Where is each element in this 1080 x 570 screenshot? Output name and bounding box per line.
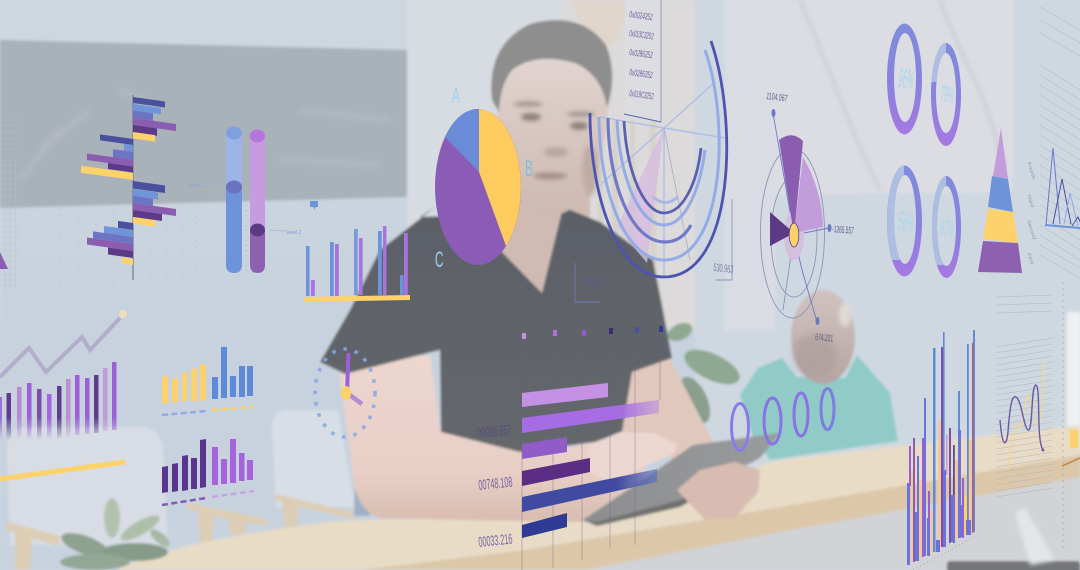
tier labels: Fourth (1026, 162, 1036, 180)
top markers (522, 326, 663, 339)
whiteboard curves (800, 0, 1005, 190)
code rows: 0x019C3252 (629, 88, 654, 102)
level 2 callout: level 2 (287, 230, 302, 236)
ring (887, 24, 922, 134)
column pale strip (725, 0, 775, 330)
arc 6 (653, 197, 678, 202)
blue cylinder fill (226, 187, 242, 273)
label: 96% (897, 64, 916, 96)
light wedge (794, 157, 823, 233)
bar 2 (522, 400, 659, 433)
purple slice (435, 109, 521, 265)
jaw shadow (582, 144, 598, 196)
chalk marks (20, 90, 390, 180)
ring 1 (732, 404, 748, 450)
yellow slice (479, 109, 521, 246)
purple level cap (250, 224, 265, 236)
blue level cap (226, 180, 242, 194)
yellow dashes (212, 407, 254, 410)
pie chart (435, 83, 533, 272)
right edge brown line (1062, 458, 1080, 466)
desk front (360, 455, 1080, 570)
bar 4 (522, 458, 590, 486)
floor (585, 477, 1080, 570)
label: 56% (897, 207, 916, 239)
tablet underside (583, 470, 745, 526)
value bracket right (716, 199, 732, 280)
shirt (320, 207, 672, 452)
long hand (347, 353, 348, 393)
head (497, 24, 608, 215)
paired bar chart (304, 201, 410, 302)
value 3: 00033.216 (478, 532, 513, 551)
right wall (695, 0, 1080, 480)
dotted base (913, 536, 976, 570)
plant behind (665, 319, 745, 428)
blue dashes (162, 411, 206, 415)
purple cylinder cap (250, 130, 265, 142)
value 2: 00748.108 (478, 475, 513, 494)
bar 5 (522, 469, 657, 512)
tablet (583, 433, 780, 522)
label right: -1265.557 (832, 223, 854, 236)
arc 2 (599, 50, 719, 260)
tier labels: First (1026, 252, 1034, 266)
code list panel (624, 0, 661, 122)
light bars (212, 439, 253, 485)
dotted ring (315, 349, 375, 437)
remainder arc (887, 166, 904, 260)
yellow baseline (304, 295, 410, 302)
level 1 leader (201, 184, 221, 186)
yellow band (983, 209, 1018, 243)
second person head (791, 290, 855, 384)
purple small bars (162, 439, 254, 505)
eye left (521, 113, 541, 121)
ring 2 (764, 398, 781, 444)
eye right (570, 122, 588, 130)
main person neck (495, 190, 590, 295)
purple band (978, 241, 1022, 273)
dotted gridlines (61, 100, 196, 288)
panel background (625, 0, 661, 122)
blue and purple bars (306, 226, 408, 296)
white device (1067, 312, 1080, 452)
left arm (338, 355, 650, 522)
donut: 96% (887, 24, 922, 134)
light dashes (212, 491, 254, 497)
remainder arc (932, 176, 946, 265)
value 1: 00095.557 (477, 423, 512, 442)
blue band (988, 176, 1013, 212)
brow left (513, 101, 543, 107)
outer arc (590, 41, 727, 277)
node top (772, 109, 776, 117)
peach bars (911, 420, 973, 562)
tier labels (1025, 162, 1036, 266)
hand right (677, 462, 760, 520)
curtain pleats (598, 120, 656, 330)
wave chart panel (996, 295, 1053, 497)
white board on wall (775, 0, 1013, 195)
dotted guide (245, 120, 247, 280)
chalkboard (0, 40, 407, 208)
slanted bars (81, 90, 176, 271)
yellow and blue small bars (162, 347, 254, 415)
node bottom (816, 317, 820, 325)
ring (932, 176, 961, 278)
pink wedge (617, 128, 664, 263)
ring 3 (794, 393, 808, 436)
rings (760, 113, 829, 322)
pale centre (784, 210, 804, 260)
top band (993, 128, 1008, 179)
bar 3 (522, 437, 567, 459)
code rows: 0x0286252 (629, 46, 654, 61)
bottom dark object (947, 561, 1080, 570)
ring 4 (821, 388, 834, 430)
chair middle (272, 410, 355, 507)
line chart with arrow (0, 310, 127, 479)
level 1 callout: level 1 (190, 183, 205, 189)
donut: 79% (931, 43, 961, 146)
short hand (347, 393, 362, 404)
code rows: 0x013C3252 (629, 28, 654, 42)
bottom-centre horizontal bars (477, 326, 663, 570)
spike chart panel (1040, 7, 1080, 278)
dark bars (162, 439, 206, 493)
bar 6 (522, 513, 567, 538)
desk top (118, 425, 1080, 570)
level 2 leader (269, 230, 286, 231)
remainder arc (932, 43, 946, 82)
label A: A (452, 83, 460, 108)
ring (887, 166, 922, 276)
label: 67% (939, 215, 955, 242)
main wedge (779, 135, 803, 235)
second person face shadow (793, 333, 837, 377)
code rows (629, 8, 654, 102)
label bottom: 674.231 (815, 331, 834, 344)
arc 5 (624, 121, 701, 213)
panel lines (1040, 7, 1080, 278)
second person shirt (740, 355, 898, 460)
yellow hub (789, 223, 799, 247)
code rows: 0x0286252 (629, 66, 654, 81)
cylinder gauges (190, 120, 302, 280)
code rows: 0x0024252 (629, 8, 654, 23)
nose shadow (544, 147, 568, 157)
value left: 936.567 (585, 275, 606, 290)
donut: 67% (932, 176, 961, 278)
lamp (572, 0, 628, 45)
spikes (1046, 148, 1080, 226)
bar 1 (522, 383, 608, 407)
wave end dot (1042, 448, 1044, 452)
axis (132, 95, 134, 280)
node right (828, 224, 832, 232)
partial pyramid left edge (0, 252, 8, 269)
radial arc chart (575, 41, 732, 302)
hair (491, 20, 612, 112)
right arm (615, 355, 720, 468)
trend line end dot (119, 310, 127, 318)
purple wave (1000, 385, 1043, 450)
hand left (585, 432, 678, 482)
value bracket left (575, 263, 600, 302)
mouth (533, 172, 567, 180)
arc 3 (608, 118, 691, 242)
donut: 56% (887, 166, 922, 276)
diverging horizontal bar chart (61, 90, 196, 288)
armrests (6, 494, 353, 570)
yellow wave (1008, 360, 1044, 470)
blue bars (907, 330, 975, 565)
brow right (567, 111, 595, 117)
label: 79% (939, 81, 955, 108)
purple bars (909, 343, 973, 562)
dark wedge (770, 212, 794, 246)
fading purple bars (0, 362, 116, 443)
label top: 1104.067 (766, 90, 788, 104)
right edge yellow bar (1070, 430, 1078, 448)
label C: C (435, 247, 444, 272)
second person head highlight (839, 303, 851, 327)
yellow bars (162, 364, 206, 404)
arc 4 (617, 120, 705, 225)
panel right border (660, 0, 662, 122)
white blurred pen (1015, 508, 1055, 565)
purple cylinder fill (250, 230, 265, 273)
blue trouser sliver (354, 480, 370, 516)
ring (931, 43, 961, 146)
tier labels: Second (1025, 219, 1036, 240)
chair left (7, 427, 168, 545)
right dotted guide (1062, 282, 1064, 552)
tier labels: Third (1025, 193, 1034, 208)
dark dashes (162, 498, 206, 505)
clock gauge (315, 349, 375, 437)
blue slice (445, 109, 479, 172)
flag marker (310, 201, 318, 210)
purple cylinder track (250, 136, 265, 232)
label B: B (525, 156, 533, 181)
vertical guides (522, 331, 660, 570)
value right: 530.963 (713, 261, 734, 276)
spokes (600, 82, 725, 277)
light wall column (407, 0, 572, 300)
blue cylinder track (226, 133, 242, 193)
curtain (560, 0, 700, 330)
polar area chart (760, 90, 854, 344)
pyramid chart (978, 128, 1036, 273)
small ring row (732, 388, 834, 450)
left grid panel (0, 120, 20, 290)
blue cylinder caps (226, 126, 242, 140)
yellow trend stroke (0, 462, 125, 479)
plant foreground (58, 498, 172, 570)
tall clustered bar chart (907, 330, 976, 570)
baseline (1045, 225, 1080, 228)
blue bars (212, 347, 253, 399)
panel lines (996, 295, 1053, 497)
face features (513, 101, 598, 196)
centre (341, 386, 351, 400)
panel bottom border (624, 114, 661, 122)
trend line (0, 318, 120, 377)
